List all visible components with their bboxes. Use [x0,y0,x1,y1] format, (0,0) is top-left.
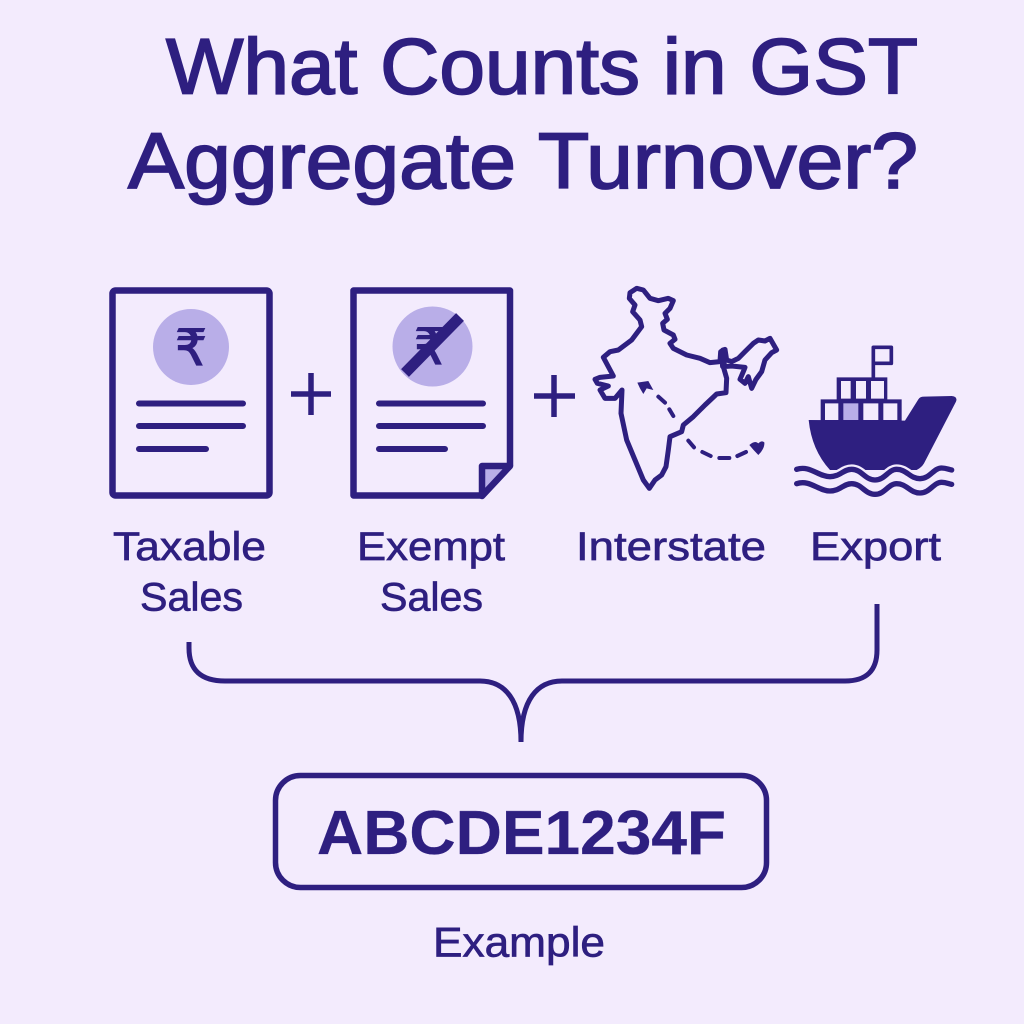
brace connector [189,604,877,742]
panel: exempt sales [354,290,510,620]
label: interstate: Interstate [576,525,766,569]
icon: plus sign one [291,373,331,415]
label: taxable sales: Sales [140,576,243,620]
label: taxable sales [113,525,266,620]
example value box [276,776,766,888]
icon: taxable sales document [112,290,270,496]
example value box: ABCDE1234F [317,799,726,868]
label: exempt sales: Exempt [357,525,505,569]
panel: taxable sales [112,290,270,620]
label: export: Export [810,525,941,569]
icon: india map with route [595,288,777,488]
panel: interstate [576,288,777,569]
icon: exempt sales document [354,290,510,496]
title: Aggregate Turnover? [128,116,918,205]
icon: plus sign two [534,375,575,417]
caption: example: Example [433,918,605,966]
panel: export [797,347,956,569]
title: What Counts in GST [166,22,918,110]
label: exempt sales [357,525,505,620]
title [128,22,918,205]
label: taxable sales: Taxable [113,525,266,569]
icon: taxable sales document: ₹ [175,320,207,376]
icon: cargo ship [797,347,956,494]
label: exempt sales: Sales [380,576,483,620]
icon: exempt sales document: ₹ [414,319,446,375]
